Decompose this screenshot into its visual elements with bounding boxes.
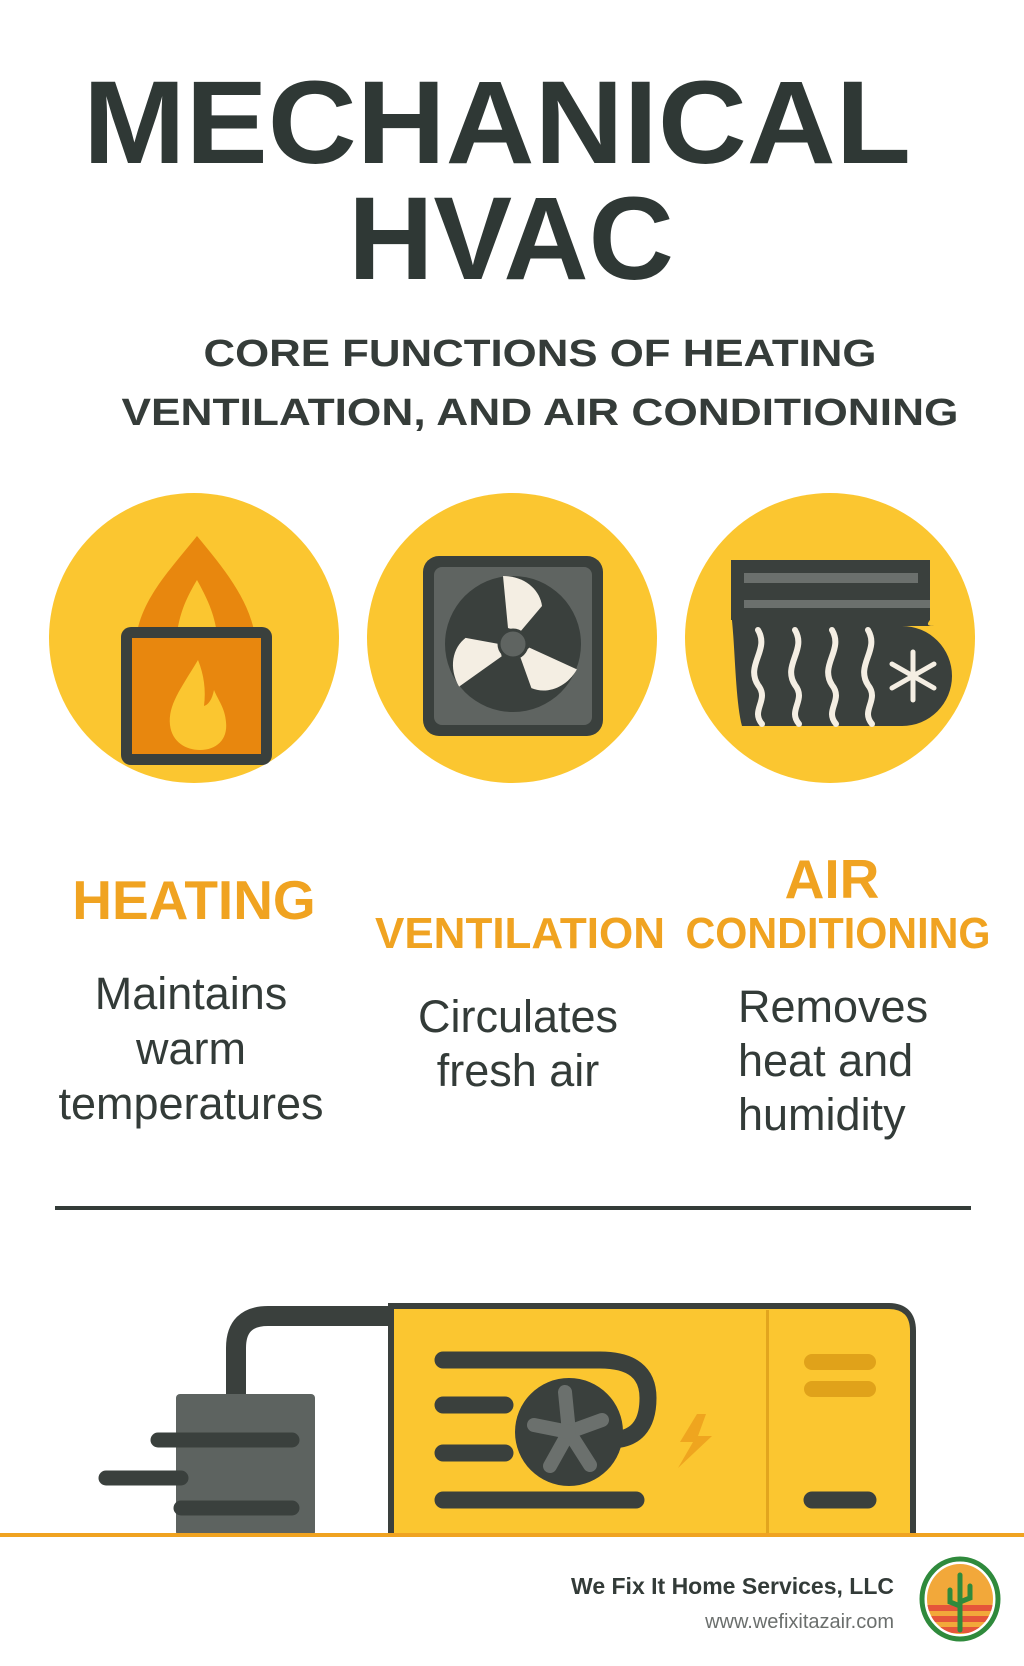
footer: company: We Fix It Home Services, LLC [571,1573,894,1599]
title: HVAC [348,173,674,305]
subtitle: CORE FUNCTIONS OF HEATING [204,333,876,375]
text: ventilation description [418,991,618,1096]
text: ventilation description: fresh air [437,1045,599,1096]
icon: air conditioning [685,493,975,783]
subtitle: VENTILATION, AND AIR CONDITIONING [122,392,958,434]
heading: air conditioning: AIR [785,848,879,910]
heading: air conditioning [686,848,990,958]
text: ventilation description: Circulates [418,991,618,1042]
illustration: outdoor HVAC unit [106,1306,913,1560]
text: air conditioning description: Removes [738,981,928,1032]
text: heating description [58,968,324,1129]
icon: heating [49,493,339,783]
text: heating description: warm [135,1023,246,1074]
text: heating description: Maintains [95,968,287,1019]
text: air conditioning description: humidity [738,1089,906,1140]
text: air conditioning description: heat and [738,1035,913,1086]
heading: ventilation: VENTILATION [375,909,665,958]
text: air conditioning description [738,981,928,1140]
icon: ventilation fan [367,493,657,783]
footer: company [571,1573,894,1633]
text: heating description: temperatures [58,1078,324,1129]
heading: air conditioning: CONDITIONING [686,909,990,958]
logo [920,1559,1000,1640]
title [83,57,911,305]
title: MECHANICAL [83,57,911,189]
footer: company: www.wefixitazair.com [704,1611,894,1633]
subtitle [122,333,958,434]
heading: heating: HEATING [72,869,316,931]
